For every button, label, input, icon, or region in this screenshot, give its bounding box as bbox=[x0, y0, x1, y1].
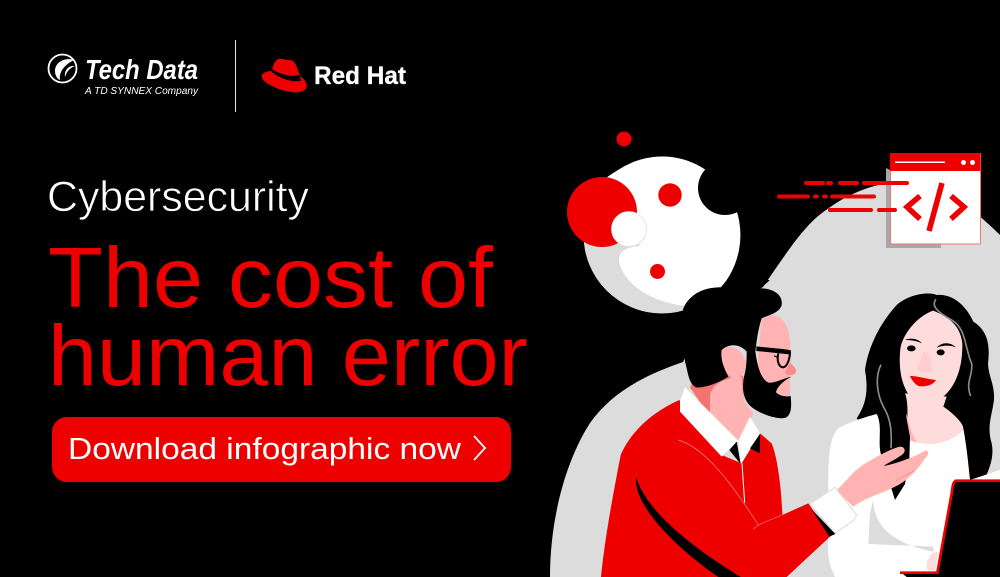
sweater seams bbox=[678, 440, 782, 529]
title: The cost of human error: human error bbox=[48, 309, 528, 404]
icon: code brackets bbox=[907, 183, 964, 231]
woman hair back bbox=[857, 293, 994, 487]
woman nose bbox=[917, 352, 933, 372]
tagline: A TD SYNNEX Company: A TD SYNNEX Company bbox=[84, 85, 199, 97]
window header bbox=[890, 153, 980, 171]
moon highlight bbox=[606, 156, 740, 306]
man ear bbox=[721, 347, 746, 378]
icon: chevron bbox=[474, 436, 485, 460]
crater: red upper bbox=[658, 183, 682, 207]
man neck shade bbox=[690, 360, 743, 447]
title: The cost of human error: The cost of bbox=[48, 231, 493, 326]
crater: large red bbox=[567, 177, 637, 247]
motion lines bbox=[779, 183, 907, 210]
man collar shadow bbox=[729, 434, 760, 464]
illustration: moon bbox=[567, 156, 752, 314]
man beard bbox=[743, 348, 792, 418]
window body bbox=[890, 154, 980, 244]
logo divider bbox=[235, 40, 236, 112]
woman neck bbox=[905, 393, 963, 444]
blouse shade bbox=[868, 500, 933, 552]
woman blouse bbox=[828, 414, 1000, 577]
floating red dot bbox=[616, 132, 632, 146]
woman hair highlights bbox=[877, 299, 972, 448]
man bbox=[601, 280, 928, 577]
laptop bbox=[900, 481, 1000, 577]
woman face bbox=[900, 311, 962, 404]
man collar bbox=[680, 387, 760, 464]
title: The cost of human error bbox=[48, 231, 528, 404]
woman bbox=[828, 293, 1000, 577]
man lip bbox=[776, 382, 790, 396]
icon: Tech Data swirl bbox=[48, 54, 76, 82]
crater: black bite bbox=[698, 161, 752, 215]
man neck bbox=[710, 377, 753, 443]
man arm shadow bbox=[636, 477, 741, 577]
window shadow bbox=[886, 168, 941, 248]
moon disc bbox=[584, 156, 740, 314]
woman eyes and brows bbox=[905, 339, 956, 348]
button: Download infographic now: Download infographic now bbox=[68, 431, 462, 466]
illustration: code window bbox=[886, 153, 980, 248]
man glasses bbox=[757, 347, 791, 367]
background blob: gray shape bbox=[550, 183, 1000, 577]
sleeve shadow bbox=[812, 509, 835, 537]
wordmark: Red Hat: Red Hat bbox=[314, 62, 407, 90]
man hair bbox=[682, 280, 782, 387]
button: Download infographic now bbox=[52, 417, 511, 482]
logo: Red Hat bbox=[262, 59, 407, 92]
woman lips bbox=[910, 376, 936, 386]
man face bbox=[757, 315, 797, 395]
woman hair front strand bbox=[877, 390, 910, 500]
man sweater bbox=[601, 400, 831, 577]
crater: red lower bbox=[650, 264, 665, 279]
wordmark: Tech Data: Tech Data bbox=[85, 54, 198, 85]
logo: Tech Data bbox=[48, 54, 199, 97]
crater: small white bbox=[612, 212, 646, 246]
man hand bbox=[836, 447, 928, 507]
subheading: Cybersecurity: Cybersecurity bbox=[47, 173, 309, 221]
man nose bbox=[785, 363, 796, 375]
illustration: people bbox=[601, 280, 1000, 577]
man cuff bbox=[810, 487, 857, 533]
woman fingers bbox=[927, 552, 938, 571]
icon: red hat bbox=[262, 59, 307, 92]
